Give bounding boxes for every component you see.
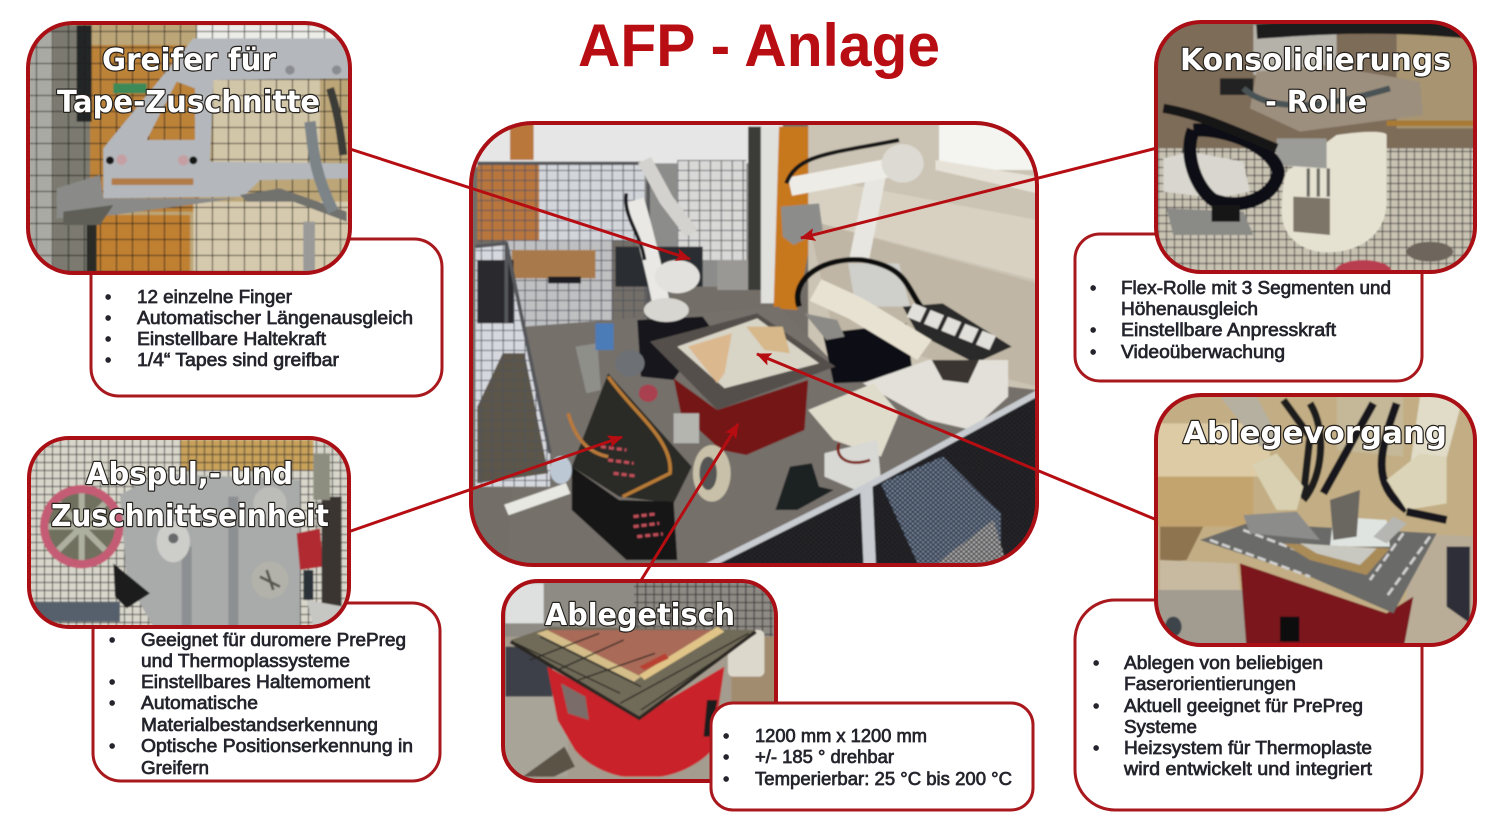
panel: Greifer text box: • [105, 329, 111, 349]
heading: Zuschnittseinheit: Zuschnittseinheit [51, 499, 329, 534]
photo: gripper [20, 15, 353, 275]
heading: Tape-Zuschnitte: Tape-Zuschnitte [57, 85, 320, 120]
frame [28, 23, 350, 273]
panel: Greifer text box: • [105, 287, 111, 307]
panel: Konsolidierung text box [1075, 234, 1422, 381]
panel: Greifer text box: Automatischer Längenausgleich [137, 308, 413, 328]
panel: Abspuleinheit text box [93, 603, 440, 781]
panel: Abspuleinheit text box: Greifern [141, 758, 209, 778]
panel: Ablegevorgang text box: Systeme [1124, 717, 1197, 737]
panel: Greifer photo [20, 15, 353, 275]
photo: roller [1158, 24, 1473, 270]
panel: Ablegetisch photo [501, 579, 778, 783]
arrow: Greifer to robot [350, 149, 690, 259]
panel: Ablegevorgang text box: • [1093, 696, 1099, 716]
heading: Greifer: Greifer für [102, 43, 276, 78]
panel: Greifer text box: • [105, 350, 111, 370]
frame [1156, 22, 1475, 272]
panel: main photo of the AFP cell [470, 120, 1041, 570]
panel: Abspuleinheit text box: • [109, 736, 115, 756]
panel: Abspuleinheit text box: Geeignet für duromere PrePreg [141, 630, 406, 650]
panel: Konsolidierung photo [1153, 15, 1480, 283]
arrow: Ablegevorgang to plate [757, 354, 1157, 520]
frame [29, 438, 349, 627]
panel: Ablegevorgang text box: Ablegen von beliebigen [1124, 653, 1323, 673]
panel: Abspuleinheit text box: und Thermoplassysteme [141, 651, 350, 671]
panel: Abspuleinheit text box: Optische Positionserkennung in [141, 736, 413, 756]
arrow: Konsolidierung to robot [801, 148, 1157, 238]
panel: Konsolidierung text box: Videoüberwachung [1121, 342, 1285, 362]
photo: spool unit [31, 440, 347, 625]
panel: Abspuleinheit text box: • [109, 672, 115, 692]
frame [503, 581, 776, 781]
panel: Abspuleinheit text box: Materialbestandserkennung [141, 715, 378, 735]
panel: Greifer text box [91, 239, 442, 396]
panel: Abspuleinheit text box: Einstellbares Haltemoment [141, 672, 370, 692]
panel: Ablegetisch text box: • [723, 769, 729, 789]
panel: Konsolidierung text box: Einstellbare Anpresskraft [1121, 320, 1336, 340]
heading: Abspul: Abspul,- und [86, 457, 293, 492]
panel: Ablegetisch text box [711, 703, 1033, 810]
heading: Ablegevorgang: Ablegevorgang [1183, 416, 1447, 451]
panel: Abspuleinheit text box: Automatische [141, 693, 258, 713]
panel: Ablegevorgang text box: • [1093, 653, 1099, 673]
panel: Greifer text box: 1/4“ Tapes sind greifbar [137, 350, 339, 370]
panel: Ablegetisch text box: • [723, 726, 729, 746]
panel: Ablegevorgang text box: • [1093, 738, 1099, 758]
photo: layup [1153, 390, 1480, 653]
panel: Ablegetisch text box: +/- 185 ° drehbar [755, 747, 894, 767]
panel: Abspuleinheit text box: • [109, 630, 115, 650]
panel: Ablegetisch text box: 1200 mm x 1200 mm [755, 726, 927, 746]
panel: Konsolidierung text box: • [1090, 278, 1096, 298]
main photo frame [471, 123, 1037, 565]
title: AFP - Anlage [578, 12, 940, 79]
photo: table [505, 583, 774, 779]
panel: Konsolidierung text box: • [1090, 342, 1096, 362]
frame [1156, 395, 1475, 645]
panel: Konsolidierung text box: Flex-Rolle mit 3 Segmenten und [1121, 278, 1391, 298]
arrow: Abspuleinheit to spool unit [348, 437, 622, 532]
heading: Konsolidierungs: Konsolidierungs [1180, 43, 1451, 78]
panel: Ablegetisch text box: • [723, 747, 729, 767]
panel: Ablegevorgang text box: Faserorientierungen [1124, 674, 1296, 694]
panel: Ablegevorgang text box: Heizsystem für Thermoplaste [1124, 738, 1372, 758]
panel: Konsolidierung text box: • [1090, 320, 1096, 340]
panel: Abspuleinheit photo [20, 430, 353, 637]
panel: Ablegevorgang text box: Aktuell geeignet für PrePreg [1124, 696, 1363, 716]
arrow: Ablegetisch to table [640, 424, 738, 582]
panel: Greifer text box: 12 einzelne Finger [137, 287, 292, 307]
panel: Abspuleinheit text box: • [109, 693, 115, 713]
panel: Konsolidierung text box: Höhenausgleich [1121, 299, 1258, 319]
panel: Greifer text box: • [105, 308, 111, 328]
panel: Ablegevorgang photo [1153, 390, 1480, 653]
heading: Rolle: - Rolle [1265, 85, 1367, 120]
panel: Ablegevorgang text box [1075, 600, 1422, 810]
panel: Ablegevorgang text box: wird entwickelt und integriert [1123, 759, 1372, 779]
panel: Ablegetisch text box: Temperierbar: 25 °C bis 200 °C [755, 769, 1012, 789]
heading: Ablegetisch: Ablegetisch [545, 598, 735, 633]
panel: Greifer text box: Einstellbare Haltekraft [137, 329, 326, 349]
